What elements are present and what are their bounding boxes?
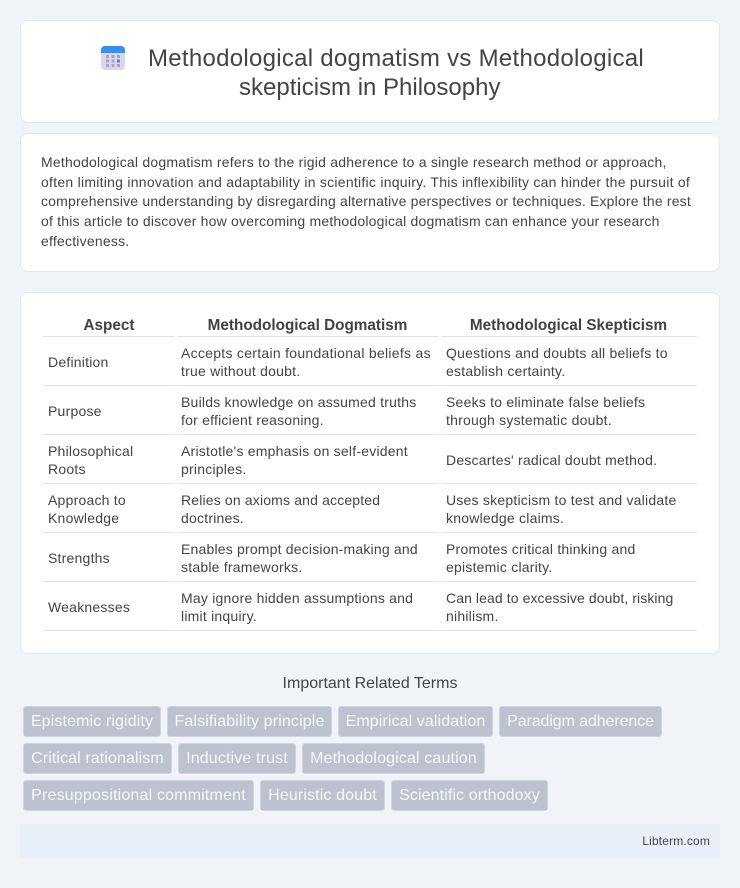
intro text: of this article to discover how overcoming methodological dogmatism can enhance your research — [41, 213, 660, 229]
strengths dogmatism: Enables prompt decision-making and — [181, 541, 418, 557]
strengths dogmatism: stable frameworks. — [181, 559, 302, 575]
title — [148, 45, 644, 101]
approach dogmatism — [181, 492, 380, 526]
purpose skepticism — [446, 394, 645, 428]
weaknesses skepticism — [446, 590, 673, 624]
tag — [23, 706, 161, 737]
purpose skepticism: through systematic doubt. — [446, 412, 612, 428]
table card — [20, 292, 720, 654]
purpose dogmatism: for efficient reasoning. — [181, 412, 324, 428]
approach skepticism: knowledge claims. — [446, 510, 564, 526]
tag — [499, 706, 662, 737]
intro text: effectiveness. — [41, 233, 129, 249]
definition skepticism: establish certainty. — [446, 363, 565, 379]
tag — [23, 743, 172, 774]
title: skepticism in Philosophy — [239, 74, 500, 101]
intro text: Methodological dogmatism refers to the rigid adherence to a single research method or approach, — [41, 154, 667, 170]
approach skepticism — [446, 492, 676, 526]
footer credit: Libterm.com — [642, 834, 710, 848]
header card — [20, 20, 720, 123]
approach dogmatism: Relies on axioms and accepted — [181, 492, 380, 508]
tag — [167, 706, 332, 737]
tag: Critical rationalism — [31, 750, 164, 767]
tag — [391, 780, 548, 811]
roots dogmatism: Aristotle's emphasis on self-evident — [181, 443, 408, 459]
tag: Inductive trust — [186, 750, 288, 767]
tag — [178, 743, 296, 774]
header: dogmatism: Methodological Dogmatism — [208, 317, 407, 334]
roots dogmatism: principles. — [181, 461, 246, 477]
tag: Paradigm adherence — [507, 713, 654, 730]
intro text: comprehensive understanding by disregarding alternative perspectives or techniques. Explore the rest — [41, 193, 691, 209]
icon: calendar — [101, 46, 125, 70]
purpose dogmatism — [181, 394, 416, 428]
row: purpose: Purpose — [48, 403, 102, 419]
row: approach to knowledge: Approach to — [48, 492, 126, 508]
tag: Presuppositional commitment — [31, 787, 246, 804]
intro text: often limiting innovation and adaptability in scientific inquiry. This inflexibility can hinder the pursuit of — [41, 174, 690, 190]
tag: Heuristic doubt — [268, 787, 377, 804]
weaknesses dogmatism — [181, 590, 413, 624]
definition dogmatism: Accepts certain foundational beliefs as — [181, 345, 431, 361]
footer bar — [20, 824, 720, 858]
weaknesses dogmatism: limit inquiry. — [181, 608, 257, 624]
definition skepticism: Questions and doubts all beliefs to — [446, 345, 668, 361]
row: approach to knowledge — [48, 492, 126, 526]
tag: Empirical validation — [346, 713, 485, 730]
row: definition: Definition — [48, 354, 109, 370]
tag — [302, 743, 485, 774]
strengths dogmatism — [181, 541, 418, 575]
roots dogmatism — [181, 443, 408, 477]
header: aspect: Aspect — [83, 317, 134, 334]
tag — [23, 780, 254, 811]
tag: Epistemic rigidity — [31, 713, 153, 730]
row: approach to knowledge: Knowledge — [48, 510, 119, 526]
purpose skepticism: Seeks to eliminate false beliefs — [446, 394, 645, 410]
definition dogmatism: true without doubt. — [181, 363, 300, 379]
header: skepticism: Methodological Skepticism — [470, 317, 667, 334]
strengths skepticism: epistemic clarity. — [446, 559, 552, 575]
roots skepticism: Descartes' radical doubt method. — [446, 452, 657, 468]
related terms heading: Important Related Terms — [283, 675, 457, 692]
weaknesses skepticism: Can lead to excessive doubt, risking — [446, 590, 673, 606]
strengths skepticism: Promotes critical thinking and — [446, 541, 635, 557]
definition skepticism — [446, 345, 668, 379]
intro text — [41, 154, 691, 249]
purpose dogmatism: Builds knowledge on assumed truths — [181, 394, 416, 410]
row: strengths: Strengths — [48, 550, 110, 566]
row: philosophical roots: Philosophical — [48, 443, 133, 459]
row: philosophical roots: Roots — [48, 461, 86, 477]
tag: Methodological caution — [310, 750, 477, 767]
strengths skepticism — [446, 541, 635, 575]
approach dogmatism: doctrines. — [181, 510, 244, 526]
definition dogmatism — [181, 345, 431, 379]
row: weaknesses: Weaknesses — [48, 599, 130, 615]
weaknesses skepticism: nihilism. — [446, 608, 499, 624]
title: Methodological dogmatism vs Methodological — [148, 45, 644, 72]
tag: Falsifiability principle — [174, 713, 325, 730]
intro card — [20, 133, 720, 272]
tag — [338, 706, 493, 737]
weaknesses dogmatism: May ignore hidden assumptions and — [181, 590, 413, 606]
approach skepticism: Uses skepticism to test and validate — [446, 492, 676, 508]
tag — [260, 780, 385, 811]
tag: Scientific orthodoxy — [399, 787, 540, 804]
row: philosophical roots — [48, 443, 133, 477]
